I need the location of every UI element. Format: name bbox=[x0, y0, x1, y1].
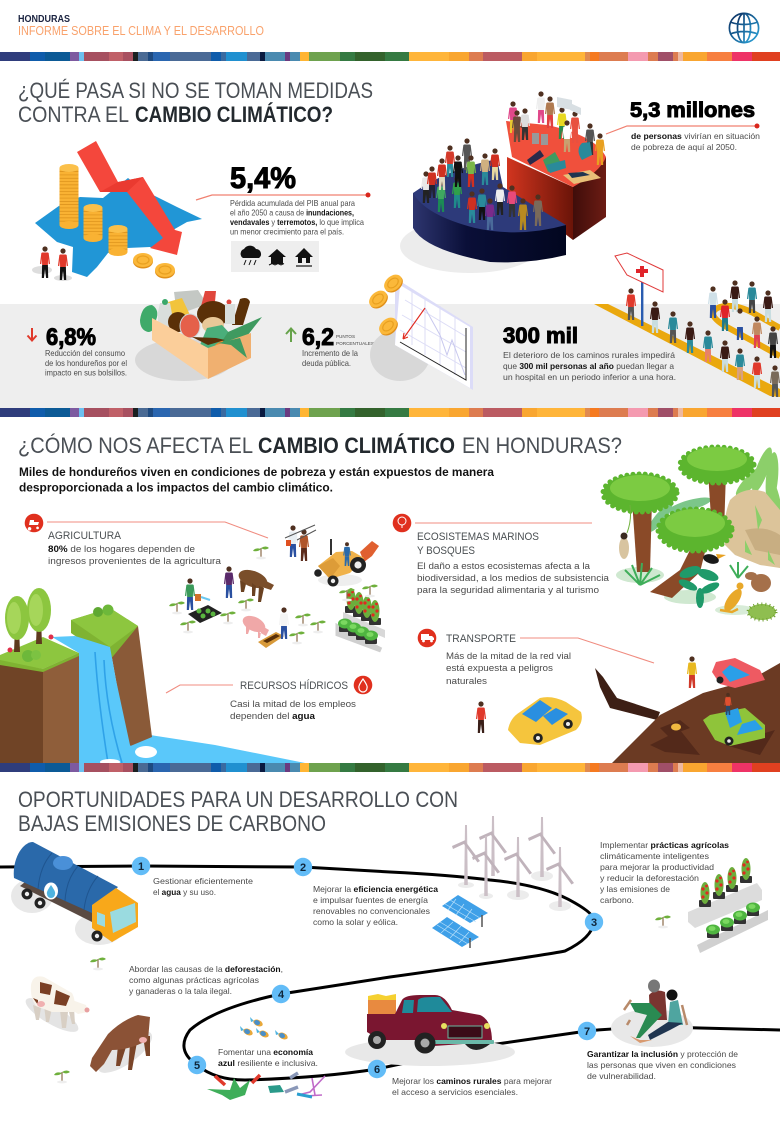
step 7: las personas que viven en condiciones bbox=[587, 1061, 736, 1070]
red car bbox=[712, 658, 765, 688]
block: agricultura: 80% de los hogares dependen de bbox=[48, 544, 195, 554]
step 7 bbox=[578, 1022, 738, 1081]
step 4 bbox=[129, 965, 290, 1003]
trees bbox=[5, 588, 54, 662]
stat: 5,4 percent: el año 2050 a causa de inundaciones, bbox=[230, 208, 354, 218]
step 1: el agua y su uso. bbox=[153, 888, 216, 897]
step 4: 4 bbox=[278, 989, 285, 1001]
step 3: y las emisiones de bbox=[600, 885, 670, 894]
spotted cow bbox=[31, 976, 90, 1028]
water fall bbox=[52, 636, 142, 763]
illustration: landslide with cars bbox=[477, 656, 780, 763]
block: ecosistemas bbox=[393, 514, 609, 595]
title: how climate change affects us bbox=[18, 433, 622, 458]
illustration: farm bbox=[169, 525, 385, 650]
subtitle: Miles de hondureños viven en condiciones de pobreza y están expuestos de manera bbox=[19, 467, 495, 479]
step 5 bbox=[188, 1048, 318, 1074]
block: ecosistemas: biodiversidad, a los medios de subsistencia bbox=[417, 573, 609, 583]
cow and herder bbox=[225, 566, 274, 602]
step 5: azul resiliente e inclusiva. bbox=[218, 1059, 318, 1068]
header: country and report name bbox=[18, 14, 264, 38]
step 5: 5 bbox=[194, 1060, 200, 1072]
ground crack bbox=[595, 668, 660, 720]
palm leaves bbox=[732, 445, 780, 530]
block: agricultura: AGRICULTURA bbox=[48, 530, 122, 542]
step 4: y ganaderas o la tala ilegal. bbox=[129, 987, 232, 996]
step 2: Mejorar la eficiencia energética bbox=[313, 885, 438, 894]
illustration: Honduras map with falling arrow and coins bbox=[32, 141, 202, 281]
icon: World Bank globe logo bbox=[729, 13, 759, 43]
illustration: cows bbox=[22, 976, 158, 1080]
yellow car bbox=[508, 697, 582, 745]
stat: 6,8 percent bbox=[28, 324, 127, 378]
illustration: fish and coral bbox=[207, 1017, 325, 1100]
step 7: 7 bbox=[584, 1026, 590, 1038]
icons: storm, earthquake, flood bbox=[231, 241, 319, 272]
step 2: e impulsar fuentes de energía bbox=[313, 896, 428, 905]
step 3: y reducir la deforestación bbox=[600, 874, 699, 883]
pig and feeder bbox=[240, 607, 288, 648]
block: transporte: Más de la mitad de la red vial bbox=[446, 651, 571, 661]
block: transporte: está expuesta a peligros bbox=[446, 663, 554, 673]
title: how climate change affects us: EN HONDURAS? bbox=[462, 433, 622, 458]
illustration: pickup truck bbox=[345, 994, 515, 1066]
pie chart with people: poverty bbox=[400, 91, 606, 273]
stat: 5,3 millones: 5,3 millones bbox=[630, 98, 755, 122]
title: what if no action: CAMBIO CLIMÁTICO? bbox=[135, 102, 333, 127]
stat: 6,2 puntos porcentuales: PORCENTUALES bbox=[336, 341, 374, 346]
title: what if no action bbox=[18, 78, 373, 127]
capybara bbox=[745, 572, 771, 592]
green car bbox=[703, 708, 765, 746]
illustration: planters bbox=[688, 858, 768, 953]
block: transporte bbox=[418, 629, 654, 686]
subtitle: desproporcionada a los impactos del cambio climático. bbox=[19, 482, 333, 494]
stat: 6,2 puntos porcentuales: PUNTOS bbox=[336, 334, 355, 339]
people bbox=[32, 246, 72, 281]
sprouts bbox=[54, 916, 671, 1083]
title: opportunities bbox=[18, 787, 458, 836]
title: opportunities: OPORTUNIDADES PARA UN DESARROLLO CON bbox=[18, 787, 458, 812]
stat: 5,4 percent: 5,4% bbox=[230, 162, 296, 195]
stat: 5,3 millones bbox=[606, 98, 760, 152]
stat: 5,4 percent: un menor crecimiento para el país. bbox=[230, 228, 344, 236]
step 3: 3 bbox=[591, 917, 597, 929]
woman bbox=[688, 656, 696, 688]
red slice bbox=[507, 157, 573, 240]
step 3: climáticamente inteligentes bbox=[600, 852, 709, 861]
step 6: el acceso a servicios esenciales. bbox=[392, 1088, 518, 1097]
title: what if no action: ¿QUÉ PASA SI NO SE TOMAN MEDIDAS bbox=[18, 78, 373, 103]
illustration: debt chart with coins bbox=[366, 271, 473, 390]
step 2: renovables no convencionales bbox=[313, 907, 430, 916]
stat: 5,4 percent: Pérdida acumulada del PIB anual para bbox=[230, 199, 355, 208]
canopies bbox=[603, 447, 754, 551]
block: ecosistemas: ECOSISTEMAS MARINOS bbox=[417, 531, 539, 543]
block: ecosistemas: El daño a estos ecosistemas afecta a la bbox=[417, 561, 590, 571]
far cliff bbox=[110, 626, 152, 747]
rock bbox=[724, 490, 780, 568]
coin stacks bbox=[60, 164, 175, 278]
step 1 bbox=[132, 857, 253, 897]
stat: 6,2 puntos porcentuales: deuda pública. bbox=[302, 359, 351, 368]
navy slice bbox=[413, 193, 566, 262]
stat: 6,8 percent: Reducción del consumo bbox=[45, 349, 125, 358]
step 1: 1 bbox=[138, 861, 144, 873]
trunks bbox=[632, 500, 652, 572]
toucan bbox=[702, 553, 726, 565]
stat: 300 mil bbox=[503, 323, 676, 382]
farmers with tools bbox=[285, 525, 316, 561]
step 2: 2 bbox=[300, 862, 306, 874]
jaguar bbox=[720, 582, 745, 614]
step 3: carbono. bbox=[600, 896, 634, 905]
colour band lower bbox=[0, 763, 780, 772]
illustration: water truck bbox=[11, 842, 138, 945]
header: country and report name: INFORME SOBRE EL CLIMA Y EL DESARROLLO bbox=[18, 23, 264, 38]
title: opportunities: BAJAS EMISIONES DE CARBONO bbox=[18, 811, 326, 836]
block: recursos hidricos: dependen del agua bbox=[230, 711, 316, 721]
step 2: como la solar y eólica. bbox=[313, 918, 398, 927]
header: country and report name: HONDURAS bbox=[18, 14, 70, 25]
step 1: Gestionar eficientemente bbox=[153, 877, 253, 886]
block: recursos hidricos: RECURSOS HÍDRICOS bbox=[240, 679, 348, 692]
monkey bbox=[619, 505, 631, 559]
mud mound bbox=[612, 663, 780, 763]
hydroponic beds bbox=[338, 588, 385, 650]
stat: 5,4 percent: vendavales y terremotos, lo que implica bbox=[230, 218, 364, 227]
step 6: Mejorar los caminos rurales para mejorar bbox=[392, 1077, 552, 1086]
stat: 5,3 millones: de pobreza de aquí al 2050. bbox=[631, 143, 737, 152]
block: agricultura: ingresos provenientes de la agricultura bbox=[48, 556, 221, 566]
block: recursos hidricos bbox=[166, 676, 372, 721]
block: ecosistemas: para la seguridad alimentaria y al turismo bbox=[417, 585, 599, 595]
step 4: como algunas prácticas agrícolas bbox=[129, 976, 259, 985]
illustration: wind turbines bbox=[452, 816, 574, 911]
grey panel bbox=[0, 304, 780, 409]
stat: 300 mil: El deterioro de los caminos rurales impedirá bbox=[503, 351, 675, 360]
stat: 300 mil: que 300 mil personas al año puedan llegar a bbox=[503, 362, 674, 371]
stat: 6,2 puntos porcentuales: 6,2 bbox=[302, 324, 334, 351]
illustration: sitting people bbox=[611, 980, 693, 1047]
watering farmer and plot bbox=[186, 578, 222, 623]
illustration: solar panels bbox=[432, 895, 488, 948]
block: transporte: naturales bbox=[446, 676, 488, 686]
stat: 6,8 percent: de los hondureños por el bbox=[45, 359, 127, 368]
stat: 6,8 percent: impacto en sus bolsillos. bbox=[45, 368, 127, 378]
crowd bbox=[422, 91, 604, 230]
step 3 bbox=[585, 841, 729, 931]
map of Honduras bbox=[35, 178, 202, 277]
sprouts bbox=[169, 546, 378, 644]
step 7: Garantizar la inclusión y protección de bbox=[587, 1050, 738, 1059]
illustration: waterfall bbox=[0, 588, 305, 765]
step 4: Abordar las causas de la deforestación, bbox=[129, 965, 283, 974]
brown cow bbox=[90, 1015, 150, 1072]
stat: 300 mil: un hospital en un periodo inferior a una hora. bbox=[503, 373, 676, 382]
block: recursos hidricos: Casi la mitad de los empleos bbox=[230, 699, 357, 709]
stat: 300 mil: 300 mil bbox=[503, 323, 578, 348]
step 3: Implementar prácticas agrícolas bbox=[600, 841, 729, 850]
illustration: queue to hospital bbox=[594, 253, 780, 397]
step 6 bbox=[368, 1060, 552, 1097]
falling red arrow bbox=[77, 141, 182, 255]
step 6: 6 bbox=[374, 1064, 380, 1076]
tractor bbox=[314, 539, 379, 586]
hospital sign bbox=[615, 253, 663, 326]
title: how climate change affects us: CAMBIO CLIMÁTICO bbox=[258, 433, 455, 458]
title: how climate change affects us: ¿CÓMO NOS AFECTA EL bbox=[18, 433, 253, 458]
step 5: Fomentar una economía bbox=[218, 1048, 313, 1057]
stat: 6,2 puntos porcentuales: Incremento de la bbox=[302, 349, 358, 358]
running man bbox=[477, 701, 485, 733]
block: transporte: TRANSPORTE bbox=[446, 633, 516, 645]
subtitle bbox=[19, 467, 495, 494]
illustration: food box bbox=[135, 290, 262, 381]
colour band top bbox=[0, 52, 780, 61]
stat: 5,3 millones: de personas vivirían en situación bbox=[631, 132, 760, 141]
step 3: para mejorar la productividad bbox=[600, 863, 714, 872]
step 2 bbox=[294, 858, 438, 927]
title: what if no action: CONTRA EL bbox=[18, 102, 129, 127]
colour band middle bbox=[0, 408, 780, 417]
near cliff bbox=[0, 662, 43, 763]
block: ecosistemas: Y BOSQUES bbox=[417, 545, 475, 557]
illustration: forest bbox=[603, 445, 780, 620]
stat: 6,2 puntos porcentuales bbox=[286, 324, 374, 368]
step 7: de vulnerabilidad. bbox=[587, 1072, 656, 1081]
pool bbox=[79, 735, 305, 763]
road path bbox=[0, 866, 780, 1080]
stat: 6,8 percent: 6,8% bbox=[46, 324, 96, 351]
plants bbox=[677, 564, 721, 608]
stat: 5,4 percent bbox=[196, 162, 370, 236]
block: agricultura bbox=[25, 514, 268, 566]
